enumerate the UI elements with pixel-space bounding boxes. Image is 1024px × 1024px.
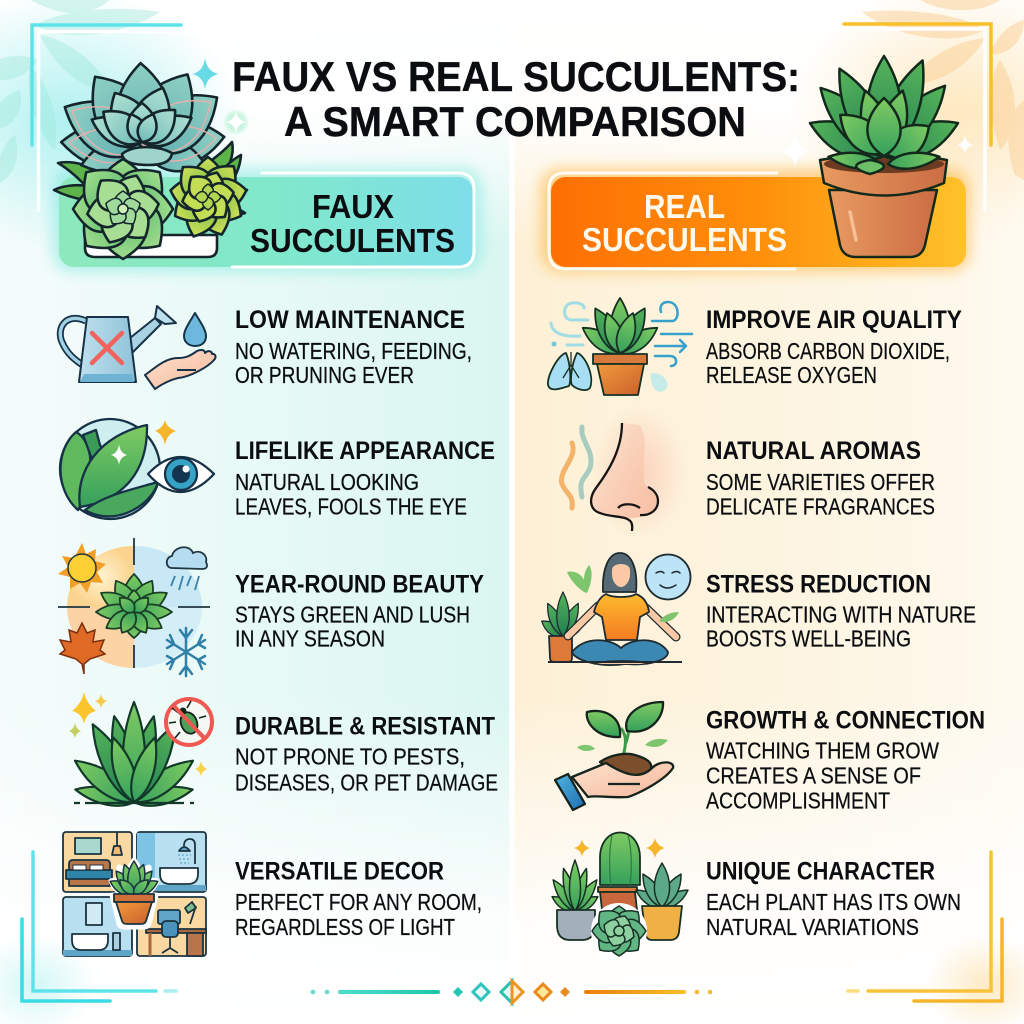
item: improve air quality <box>548 298 692 395</box>
text: year-round beauty: STAYS GREEN AND LUSH <box>235 602 470 628</box>
text: low maintenance: LOW MAINTENANCE <box>235 306 465 334</box>
text: lifelike appearance: LIFELIKE APPEARANCE <box>235 437 495 465</box>
text: improve air quality: ABSORB CARBON DIOXIDE, <box>706 338 950 364</box>
text: lifelike appearance: NATURAL LOOKING <box>235 469 419 495</box>
back leaves <box>54 142 247 218</box>
text: unique character: UNIQUE CHARACTER <box>706 858 935 886</box>
item: growth and connection <box>555 702 673 810</box>
rosette <box>96 574 172 638</box>
text: lifelike appearance <box>235 437 495 520</box>
real banner label <box>582 188 787 258</box>
icon: plant, lungs and air flow <box>548 298 692 395</box>
shirt <box>594 594 649 640</box>
text: stress reduction: BOOSTS WELL-BEING <box>706 626 911 652</box>
text: year-round beauty: YEAR-ROUND BEAUTY <box>235 570 484 598</box>
title <box>232 53 800 145</box>
text: growth and connection: ACCOMPLISHMENT <box>706 788 890 814</box>
sparkle left <box>780 133 810 167</box>
item: low maintenance <box>60 306 215 389</box>
faux banner label: SUCCULENTS <box>250 222 455 259</box>
text: versatile decor <box>235 858 482 940</box>
real banner label: SUCCULENTS <box>582 221 787 258</box>
faux banner label: FAUX <box>312 188 394 225</box>
text: unique character: NATURAL VARIATIONS <box>706 914 919 940</box>
arms <box>568 606 676 637</box>
frame corner: top left <box>32 25 208 210</box>
icon: leaves and eye <box>60 419 214 519</box>
text: year-round beauty: IN ANY SEASON <box>235 626 385 652</box>
blue rosette <box>53 62 232 180</box>
text: low maintenance <box>235 306 472 388</box>
item: stress reduction <box>539 553 690 665</box>
icon: agave with no-bug sign <box>69 692 212 810</box>
text: unique character <box>706 858 961 940</box>
panel: faux succulents banner <box>52 168 482 272</box>
item: durable and resistant <box>69 692 212 810</box>
calm face <box>646 554 690 600</box>
sparkles <box>192 58 219 89</box>
item: year-round beauty <box>58 538 210 676</box>
snowflake <box>167 628 205 676</box>
green rosette <box>70 156 176 262</box>
corner glow: top right <box>790 0 1024 240</box>
text: improve air quality: RELEASE OXYGEN <box>706 362 877 388</box>
icon: crossed watering can with hand <box>60 306 215 389</box>
icon: rooms with potted plant <box>63 832 206 956</box>
title: A SMART COMPARISON <box>284 98 746 145</box>
text: durable and resistant <box>235 712 498 796</box>
item: versatile decor <box>63 832 206 956</box>
text: improve air quality: IMPROVE AIR QUALITY <box>706 306 962 334</box>
text: year-round beauty <box>235 570 484 652</box>
corner glow: top left <box>0 0 240 250</box>
centre divider glow <box>509 130 515 990</box>
frame corner: bottom left <box>22 852 176 1001</box>
potted plant <box>539 592 587 641</box>
leaves <box>804 55 964 174</box>
text: natural aromas: SOME VARIETIES OFFER <box>706 469 935 495</box>
decorative leaves: top left <box>0 0 160 185</box>
text: versatile decor: PERFECT FOR ANY ROOM, <box>235 889 482 915</box>
text: lifelike appearance: LEAVES, FOOLS THE EYE <box>235 494 467 520</box>
background: faux side <box>0 0 510 1024</box>
text: growth and connection <box>706 706 985 814</box>
icon: four different succulents <box>549 832 691 958</box>
lime rosette <box>167 157 249 242</box>
title: FAUX VS REAL SUCCULENTS: <box>232 53 800 100</box>
text: growth and connection: GROWTH & CONNECTION <box>706 706 985 734</box>
real banner label: REAL <box>644 188 725 225</box>
hair <box>603 553 636 592</box>
text: growth and connection: CREATES A SENSE OF <box>706 762 921 788</box>
legs <box>572 640 668 665</box>
icon: person meditating <box>539 553 690 665</box>
text: versatile decor: REGARDLESS OF LIGHT <box>235 914 455 940</box>
text: unique character: EACH PLANT HAS ITS OWN <box>706 889 961 915</box>
sun <box>58 543 106 593</box>
frame corner: bottom right <box>848 852 1002 1001</box>
frame corner: top right <box>816 24 991 210</box>
decorative leaves: top right <box>862 0 1024 180</box>
text: growth and connection: WATCHING THEM GROW <box>706 738 940 764</box>
rain cloud <box>167 547 207 590</box>
text: natural aromas: NATURAL AROMAS <box>706 437 921 465</box>
icon: nose with scent wisps <box>561 406 688 538</box>
item: natural aromas <box>561 406 688 538</box>
text: stress reduction: STRESS REDUCTION <box>706 570 931 598</box>
illustration: faux succulents arrangement <box>53 58 249 262</box>
footer divider ornament <box>311 981 712 1003</box>
corner glow: bottom right <box>925 935 1024 1024</box>
text: stress reduction <box>706 570 976 652</box>
face <box>612 564 630 587</box>
text: durable and resistant: DURABLE & RESISTANT <box>235 712 495 740</box>
icon: hand holding seedling <box>555 702 673 810</box>
white pot <box>85 235 217 257</box>
text: improve air quality <box>706 306 962 388</box>
item: unique character <box>549 832 691 958</box>
icon: four seasons with rosette <box>58 538 210 676</box>
corner glow: bottom left <box>0 935 95 1024</box>
item: lifelike appearance <box>60 419 214 519</box>
text: durable and resistant: DISEASES, OR PET DAMAGE <box>235 770 498 796</box>
maple leaf <box>60 623 105 674</box>
sparkle right <box>957 135 973 154</box>
text: stress reduction: INTERACTING WITH NATURE <box>706 602 976 628</box>
text: durable and resistant: NOT PRONE TO PESTS, <box>235 744 465 770</box>
text: low maintenance: NO WATERING, FEEDING, <box>235 338 472 364</box>
text: natural aromas: DELICATE FRAGRANCES <box>706 494 935 520</box>
faux banner label <box>250 188 455 259</box>
terracotta pot <box>829 190 937 257</box>
illustration: real succulent in pot <box>780 55 973 257</box>
text: natural aromas <box>706 437 935 520</box>
panel: real succulents banner <box>540 168 970 272</box>
text: versatile decor: VERSATILE DECOR <box>235 858 444 886</box>
background: real side <box>514 0 1024 1024</box>
text: low maintenance: OR PRUNING EVER <box>235 362 414 388</box>
